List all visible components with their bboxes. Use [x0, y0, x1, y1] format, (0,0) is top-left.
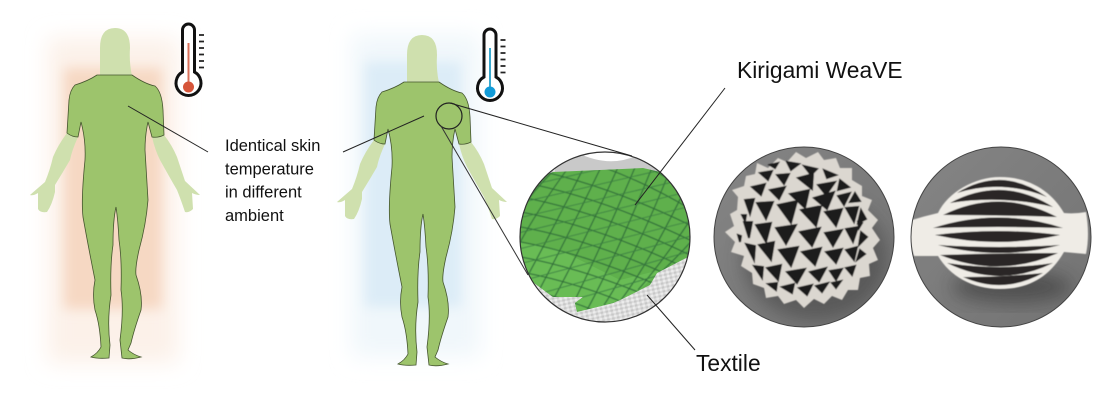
arrow: zoom line lower: [441, 126, 528, 275]
sphere body: [725, 152, 880, 308]
panel: cold ambient glow: [352, 35, 480, 357]
arrow: leader to cold body: [343, 116, 424, 152]
white band and ball: [910, 177, 1088, 289]
panel: kirigami sphere photo: [714, 147, 894, 327]
arrow: zoom line upper: [450, 103, 632, 156]
icon: hot thermometer: [176, 24, 204, 95]
panel: striped bulge photo: [910, 147, 1091, 327]
callout: identical skin temperature: temperature: [225, 160, 314, 178]
figure: body in warm ambient: [30, 28, 200, 359]
callout: identical skin temperature: ambient: [225, 207, 284, 225]
icon: cold thermometer: [478, 29, 506, 100]
sphere ring: [714, 147, 894, 327]
black triangles: [738, 162, 867, 295]
heading: Kirigami WeaVE label: Kirigami WeaVE: [737, 57, 903, 83]
icon: small magnifier circle on shoulder: [436, 103, 462, 129]
dark stripes: [957, 180, 1047, 197]
magnifier ring: [520, 152, 690, 322]
arrow: leader to Kirigami WeaVE: [635, 88, 725, 205]
panel: magnified textile circle: [520, 156, 690, 322]
callout: identical skin temperature: in different: [225, 184, 302, 202]
callout: identical skin temperature: [225, 137, 320, 225]
heading: Textile label: Textile: [696, 350, 761, 376]
kirigami green patch: [520, 168, 690, 312]
arrow: leader to warm body: [128, 106, 208, 152]
arrow: leader to textile: [647, 295, 695, 350]
figure: body in cold ambient: [337, 35, 507, 366]
panel: warm ambient glow: [48, 38, 178, 363]
bulge ring: [911, 147, 1091, 327]
callout: identical skin temperature: Identical skin: [225, 137, 320, 155]
